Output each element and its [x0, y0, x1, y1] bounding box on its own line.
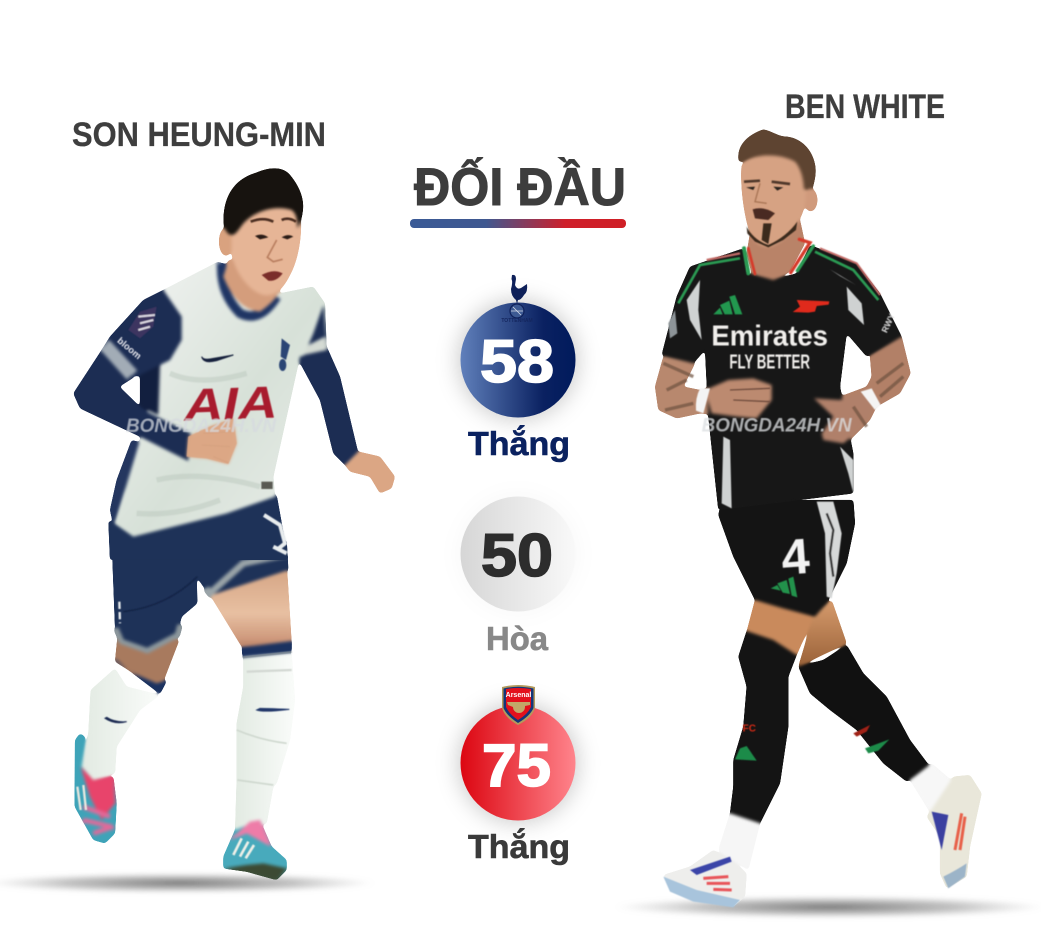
grey band: [101, 340, 137, 379]
glow: [460, 496, 576, 612]
ear: [804, 189, 817, 211]
right thigh: [210, 563, 292, 647]
ground shadow: Son: [0, 873, 375, 893]
player name: Ben White: BEN WHITE: [785, 88, 945, 126]
upper body details: White: [663, 181, 903, 508]
arsenal cannon: [793, 300, 829, 313]
right boot: [223, 820, 287, 880]
shorts top: [108, 495, 288, 560]
stat: Tottenham wins: [458, 275, 578, 462]
watermark: BONGDA24H.VN: [702, 416, 853, 437]
player figure: Son Heung-Min: [73, 168, 395, 880]
upper body: White: [655, 129, 911, 510]
title underline: [410, 219, 626, 228]
face: [741, 155, 806, 247]
front thigh: [747, 600, 813, 655]
adidas logo shorts: [771, 577, 797, 597]
sleeve sponsor text: bloom: [115, 336, 143, 361]
lower body details: Son: [77, 577, 292, 858]
short sleeve left: [102, 290, 182, 377]
left hand: [187, 418, 237, 464]
upper body details: White: RWY: [879, 312, 897, 334]
sponsor Emirates: Emirates: [711, 321, 828, 353]
tattoos: [663, 363, 903, 427]
circle: [460, 496, 576, 612]
label: Thắng: [468, 425, 570, 462]
glow: [458, 703, 578, 823]
hair: [224, 168, 303, 235]
neck: [747, 220, 805, 280]
right hand: [814, 392, 875, 443]
label: Thắng: [468, 828, 570, 865]
shirt body: [115, 262, 327, 537]
lower body: White: [663, 500, 982, 907]
beard and features: [744, 181, 797, 247]
shorts white logo: [264, 515, 287, 553]
number: 50: [481, 522, 553, 589]
circle: [460, 302, 576, 418]
long sleeve left forearm: [73, 350, 191, 461]
back thigh: [798, 600, 847, 667]
under arm: [140, 365, 160, 415]
hair: [738, 129, 816, 189]
front sock: [730, 631, 797, 823]
sponsor AIA: AIA: [182, 377, 278, 431]
shorts number: 4: [779, 528, 811, 586]
premier league patch: [128, 307, 157, 338]
right arm: [813, 337, 911, 443]
wristband right: [861, 388, 881, 410]
sponsor FLY BETTER: FLY BETTER: [729, 350, 810, 373]
finger lines: [202, 432, 232, 463]
back white sock: [910, 763, 955, 815]
label: Hòa: [486, 620, 549, 657]
left hand: [705, 378, 772, 418]
spurs chest crest: [279, 338, 290, 371]
ground shadow: White: [615, 896, 1041, 918]
title: ĐỐI ĐẦU: [414, 157, 626, 217]
lower body: Son: [75, 540, 295, 880]
back sock: [798, 645, 930, 782]
right hand: [345, 452, 395, 493]
wristband left: [696, 388, 710, 413]
sleeve band right: [303, 305, 327, 357]
sleeve graphic stripes: [687, 269, 864, 508]
upper body: Son: [73, 168, 395, 560]
icon: Tottenham crest: [501, 275, 533, 324]
shorts: [718, 500, 855, 617]
left thigh: [115, 638, 179, 690]
number: 75: [482, 732, 551, 799]
number: 58: [480, 328, 554, 395]
ear: [219, 228, 233, 256]
front white sock: [718, 813, 760, 870]
right sock: [235, 641, 295, 833]
lower body details: White: [663, 502, 967, 907]
adidas logo: [713, 295, 742, 314]
icon: Arsenal crest: Arsenal: [506, 692, 531, 699]
lower body details: White: FC: [743, 724, 756, 735]
shoulder piping: [678, 248, 880, 303]
shirt side panel: [110, 440, 143, 525]
nike swoosh: [202, 355, 233, 362]
right sleeve arm: [297, 347, 358, 465]
stat: draws: [460, 496, 576, 657]
sleeve patches: [668, 310, 677, 338]
glow: [458, 300, 578, 420]
watermark: BONGDA24H.VN: [126, 416, 277, 437]
back boot: [927, 775, 982, 888]
left boot: [75, 733, 117, 843]
front boot: [663, 850, 747, 907]
player figure: Ben White: [655, 129, 982, 907]
left sock: [82, 659, 167, 780]
shorts: [112, 540, 288, 652]
stat: Arsenal wins: [458, 685, 578, 865]
upper body details: Son: [115, 219, 296, 553]
jersey: [662, 245, 902, 510]
shirt tag: [261, 482, 273, 489]
left arm: [655, 357, 772, 418]
shirt shading folds: [137, 373, 260, 514]
icon: Arsenal crest: [502, 685, 535, 725]
eyes, nose, mouth: [251, 219, 296, 281]
collar: [222, 263, 277, 316]
collar: [744, 239, 813, 274]
face: [232, 204, 301, 295]
circle: [460, 706, 576, 820]
icon: Tottenham crest: TOTTENHAM: [501, 318, 533, 324]
neck: [223, 260, 280, 312]
player name: Son Heung-Min: SON HEUNG-MIN: [72, 116, 326, 154]
